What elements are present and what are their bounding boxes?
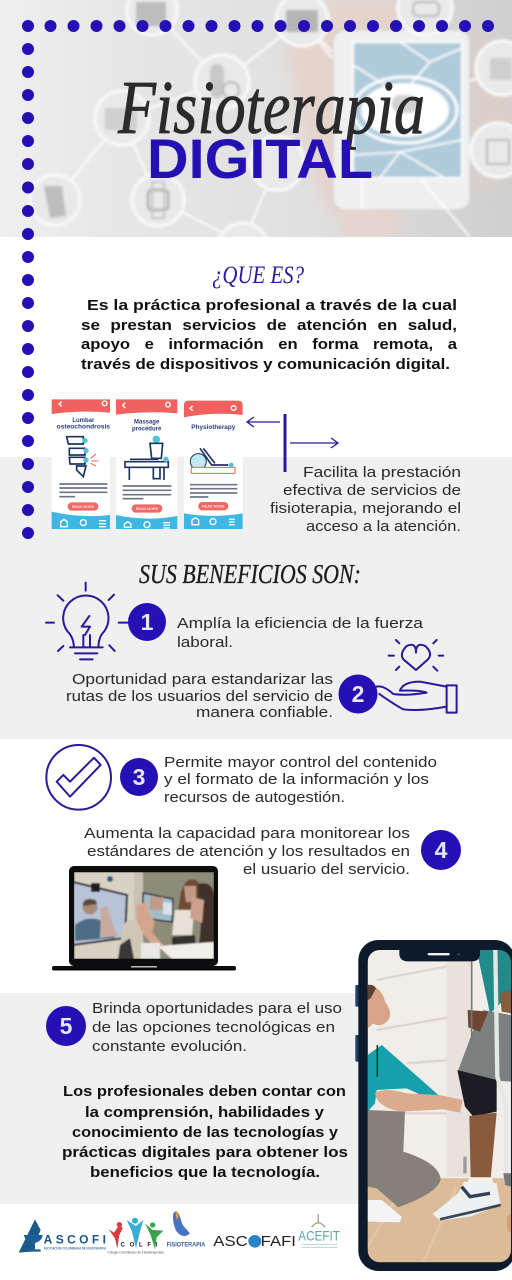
benefit 5: constante evolución. <box>92 1038 247 1055</box>
app card: massage: Massage <box>134 419 160 425</box>
benefit 2: rutas de los usuarios del servicio de <box>66 688 333 705</box>
facilita text: acceso a la atención. <box>306 518 461 535</box>
logo: ascofi: ASCOFI <box>44 1232 106 1246</box>
benefit 5: 5 <box>60 1013 73 1039</box>
icon: check circle <box>46 745 111 810</box>
partner logos <box>19 1211 340 1254</box>
title <box>117 66 425 190</box>
benefit 2: 2 <box>352 681 364 707</box>
woman <box>368 985 390 1028</box>
benefit 2: manera confiable. <box>196 704 333 721</box>
benefit 1 <box>128 603 424 651</box>
definition text: través de dispositivos y comunicación digital. <box>81 356 450 373</box>
benefit 4: 4 <box>435 837 448 863</box>
smartphone with physiotherapy photo <box>355 940 512 1271</box>
benefit 5: de las opciones tecnológicas en <box>92 1019 335 1036</box>
benefit 3 <box>120 754 437 806</box>
benefit 1: laboral. <box>177 634 233 651</box>
app card: physiotherapy: READ MORE <box>202 505 225 509</box>
definition text: se prestan servicios de atención en salud, <box>81 317 457 334</box>
closing statement: la comprensión, habilidades y <box>85 1104 325 1121</box>
man <box>477 950 511 1013</box>
app card: massage: READ MORE <box>136 507 159 511</box>
facilita text <box>270 464 461 535</box>
benefit 4: estándares de atención y los resultados en <box>87 843 410 860</box>
heading: que es: ¿QUE ES? <box>212 262 304 289</box>
facilita text: fisioterapia, mejorando el <box>270 500 461 517</box>
closing statement: Los profesionales deben contar con <box>63 1083 346 1100</box>
logo: colfi <box>107 1218 164 1254</box>
phone <box>333 30 470 210</box>
benefit 3: Permite mayor control del contenido <box>164 754 437 771</box>
icon: hand with heart <box>377 640 457 713</box>
header photo: hand holding phone with health network <box>0 0 512 237</box>
app card: lumbar <box>52 399 111 529</box>
app card: lumbar: osteochondrosis <box>57 425 111 431</box>
logo: fisioterapia: FISIOTERAPIA <box>167 1241 206 1248</box>
floor <box>368 1178 511 1262</box>
benefit 4: Aumenta la capacidad para monitorear los <box>84 825 410 842</box>
app card: lumbar: READ MORE <box>72 505 95 509</box>
logo: acefit <box>298 1214 340 1247</box>
facilita text: Facilita la prestación <box>303 464 461 481</box>
definition text: Es la práctica profesional a través de la cual <box>87 297 457 314</box>
benefit 2 <box>66 671 378 721</box>
benefit 4 <box>84 825 461 878</box>
definition text: apoyo e información en forma remota, a <box>81 336 458 353</box>
benefit 1: 1 <box>141 609 154 635</box>
logo: ascofi <box>19 1219 106 1253</box>
closing statement <box>62 1083 348 1181</box>
app card: physiotherapy: Physiotherapy <box>191 425 236 431</box>
app card: massage <box>116 399 177 529</box>
app card: lumbar: Lumbar <box>72 418 95 424</box>
logo: ascofafi: ASCOFAFI <box>213 1234 296 1250</box>
app screens illustration <box>52 399 243 529</box>
closing statement: beneficios que la tecnología. <box>90 1164 320 1181</box>
heading: sus beneficios: SUS BENEFICIOS SON: <box>139 559 361 589</box>
benefit 4: el usuario del servicio. <box>243 861 410 878</box>
laptop with video call photo <box>52 866 236 970</box>
logo: fisioterapia <box>167 1211 206 1248</box>
benefit 3: y el formato de la información y los <box>164 771 429 788</box>
title: Fisioterapia <box>117 66 425 150</box>
benefit 5: Brinda oportunidades para el uso <box>92 1000 342 1017</box>
benefit 3: 3 <box>133 764 145 790</box>
facilita text: efectiva de servicios de <box>283 482 461 499</box>
title: DIGITAL <box>147 127 373 190</box>
closing statement: conocimiento de las tecnologías y <box>72 1124 339 1141</box>
arrows and divider <box>247 414 338 472</box>
benefit 3: recursos de autogestión. <box>164 789 345 806</box>
app card: massage: procedure <box>132 426 162 432</box>
logo: ascofi: ASOCIACIÓN COLOMBIANA DE FISIOTERAPIA <box>44 1246 106 1251</box>
logo: colfi: COLFI <box>121 1243 158 1249</box>
benefit 1: Amplía la eficiencia de la fuerza <box>177 615 424 632</box>
app card: physiotherapy <box>184 401 243 529</box>
logo: colfi: Colegio Colombiano de Fisioterapeutas <box>107 1250 164 1254</box>
benefit 2: Oportunidad para estandarizar las <box>72 671 333 688</box>
benefit 5 <box>46 1000 342 1055</box>
closing statement: prácticas digitales para obtener los <box>62 1144 348 1161</box>
icon: light bulb <box>46 583 128 659</box>
dotted frame <box>22 20 494 539</box>
definition text <box>81 297 458 373</box>
logo: acefit: ACEFIT <box>298 1228 340 1244</box>
